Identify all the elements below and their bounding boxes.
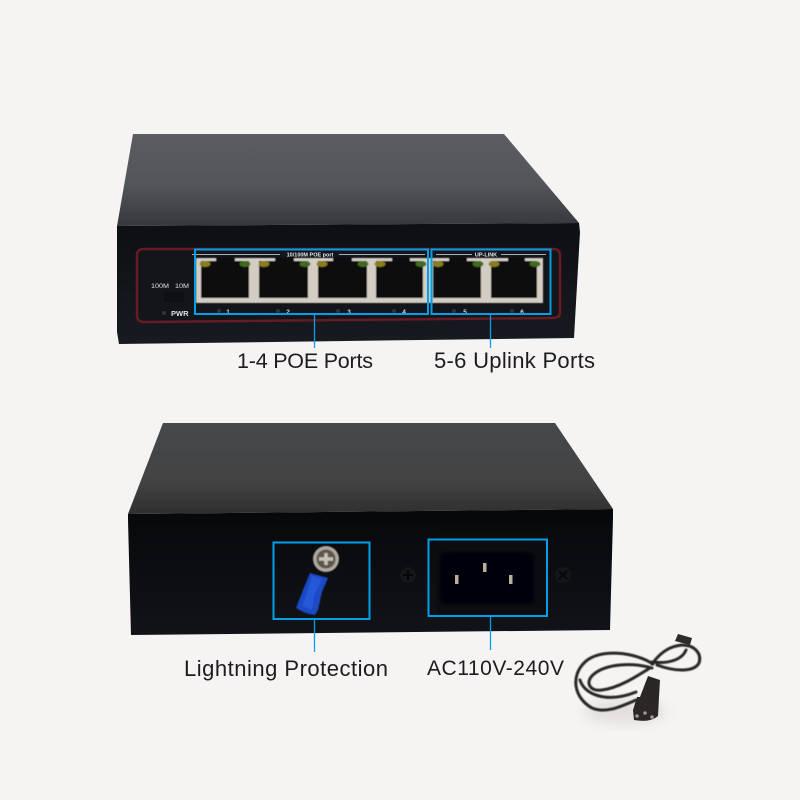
icon: power cord (576, 634, 700, 724)
IEC connector (633, 697, 659, 721)
port numbers: 2 (286, 309, 290, 316)
ground screw (313, 546, 339, 572)
port numbers: 1 (226, 309, 230, 316)
leader line: lightning protection (314, 619, 316, 652)
label: uplink ports: 5-6 Uplink Ports (434, 348, 595, 373)
port numbers: 3 (347, 309, 351, 316)
cord shadow (583, 700, 667, 724)
power socket (440, 552, 534, 604)
leader line: POE ports (314, 314, 316, 348)
port group label: uplink: UP-LINK (475, 252, 497, 258)
screw: right (555, 567, 571, 583)
port well (196, 258, 543, 299)
cord plug body (640, 676, 660, 697)
screw slots (403, 570, 567, 580)
speed labels: 100M (151, 283, 169, 290)
callout box: AC input (428, 540, 547, 616)
label: POE ports: 1-4 POE Ports (237, 349, 373, 373)
leader line: AC input (490, 616, 492, 650)
status LEDs (162, 309, 514, 315)
rear panel (128, 509, 613, 635)
port group label: POE: 10/100M POE port (287, 252, 334, 258)
panel heading strips (192, 254, 546, 256)
label: AC voltage: AC110V-240V (427, 657, 564, 680)
red panel outline (137, 249, 560, 322)
switch: front view: 10M (175, 283, 189, 290)
front panel of switch (117, 223, 580, 344)
amber LEDs (200, 261, 500, 267)
green LEDs (240, 261, 540, 267)
screw: left (400, 567, 416, 583)
top face of rear switch (128, 423, 613, 514)
T stems (249, 261, 491, 270)
leader line: uplink ports (490, 314, 492, 348)
power label: PWR (171, 309, 189, 318)
port numbers: 5 (463, 309, 467, 316)
label: lightning protection: Lightning Protection (184, 656, 388, 681)
port frame (196, 258, 543, 303)
connector holes (635, 711, 654, 719)
socket pins (455, 563, 512, 584)
callout box: 5-6 uplink ports (432, 250, 550, 314)
port numbers (226, 309, 524, 316)
port block (196, 258, 543, 303)
callout box: 1-4 POE ports (195, 250, 428, 314)
top face of switch (117, 134, 579, 226)
callout box: lightning protection (274, 542, 370, 619)
port numbers: 6 (520, 309, 524, 316)
switch: front view (117, 134, 580, 344)
blue terminal (296, 573, 328, 615)
cord coils (576, 645, 700, 710)
far plug (675, 634, 692, 645)
switch: rear view (128, 423, 613, 635)
power socket recess (436, 532, 548, 616)
port numbers: 4 (402, 309, 406, 316)
speed switch (164, 292, 184, 302)
